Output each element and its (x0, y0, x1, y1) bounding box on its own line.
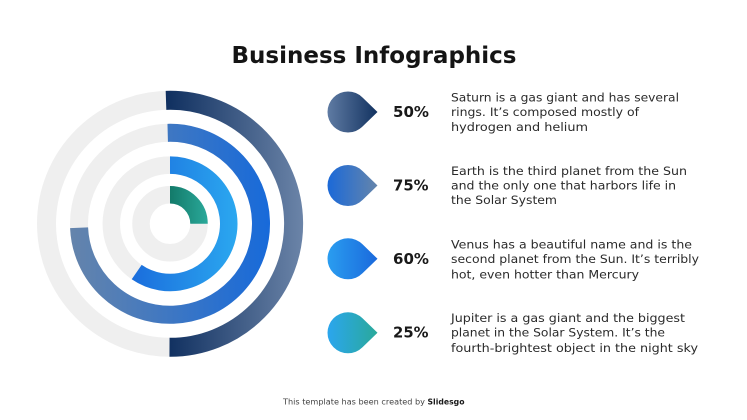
ring arc: Jupiter 25% (170, 195, 199, 224)
ring arc: Earth 75% (79, 133, 261, 315)
ring arc: Saturn 50% (166, 100, 294, 347)
row: Saturn (328, 90, 679, 134)
icon: Venus drop marker (328, 238, 378, 279)
ring track: second (79, 133, 261, 315)
value: 25%: 25% (393, 324, 429, 342)
text: Venus description: second planet from the Sun. It’s terribly (451, 252, 699, 266)
icon: Earth drop marker (328, 165, 378, 206)
ring arc: Venus 60% (137, 165, 229, 282)
text: Earth description: Earth is the third planet from the Sun (451, 164, 687, 178)
text: Venus description: hot, even hotter than Mercury (451, 268, 639, 282)
text: Jupiter description: fourth-brightest object in the night sky (451, 341, 698, 355)
text: Earth description: and the only one that harbors life in (451, 178, 676, 192)
text: Venus description (451, 238, 699, 282)
value: 60%: 60% (393, 250, 429, 268)
footer credit: Slidesgo (428, 398, 464, 406)
row: Earth (328, 164, 687, 207)
text: Earth description: the Solar System (451, 193, 557, 207)
text: Saturn description: rings. It’s composed mostly of (451, 105, 640, 119)
ring track: third (111, 165, 229, 282)
footer credit: This template has been created by (282, 398, 426, 406)
ring track: inner (141, 195, 199, 253)
ring track: outer (46, 100, 294, 347)
row: Jupiter (328, 311, 698, 355)
chart: concentric radial progress rings (46, 100, 294, 347)
text: Saturn description: hydrogen and helium (451, 120, 588, 134)
icon: Jupiter drop marker (328, 312, 378, 353)
value: 75%: 75% (393, 176, 429, 194)
text: Jupiter description (450, 311, 698, 355)
title: Business Infographics (232, 43, 516, 69)
text: Saturn description (451, 90, 679, 134)
text: Jupiter description: planet in the Solar System. It’s the (451, 326, 665, 340)
row: Venus (328, 238, 699, 282)
text: Earth description (451, 164, 687, 207)
value: 50%: 50% (393, 103, 429, 121)
text: Jupiter description: Jupiter is a gas giant and the biggest (450, 311, 685, 325)
icon: Saturn drop marker (328, 92, 378, 132)
text: Venus description: Venus has a beautiful name and is the (451, 238, 692, 252)
text: Saturn description: Saturn is a gas giant and has several (451, 90, 679, 104)
